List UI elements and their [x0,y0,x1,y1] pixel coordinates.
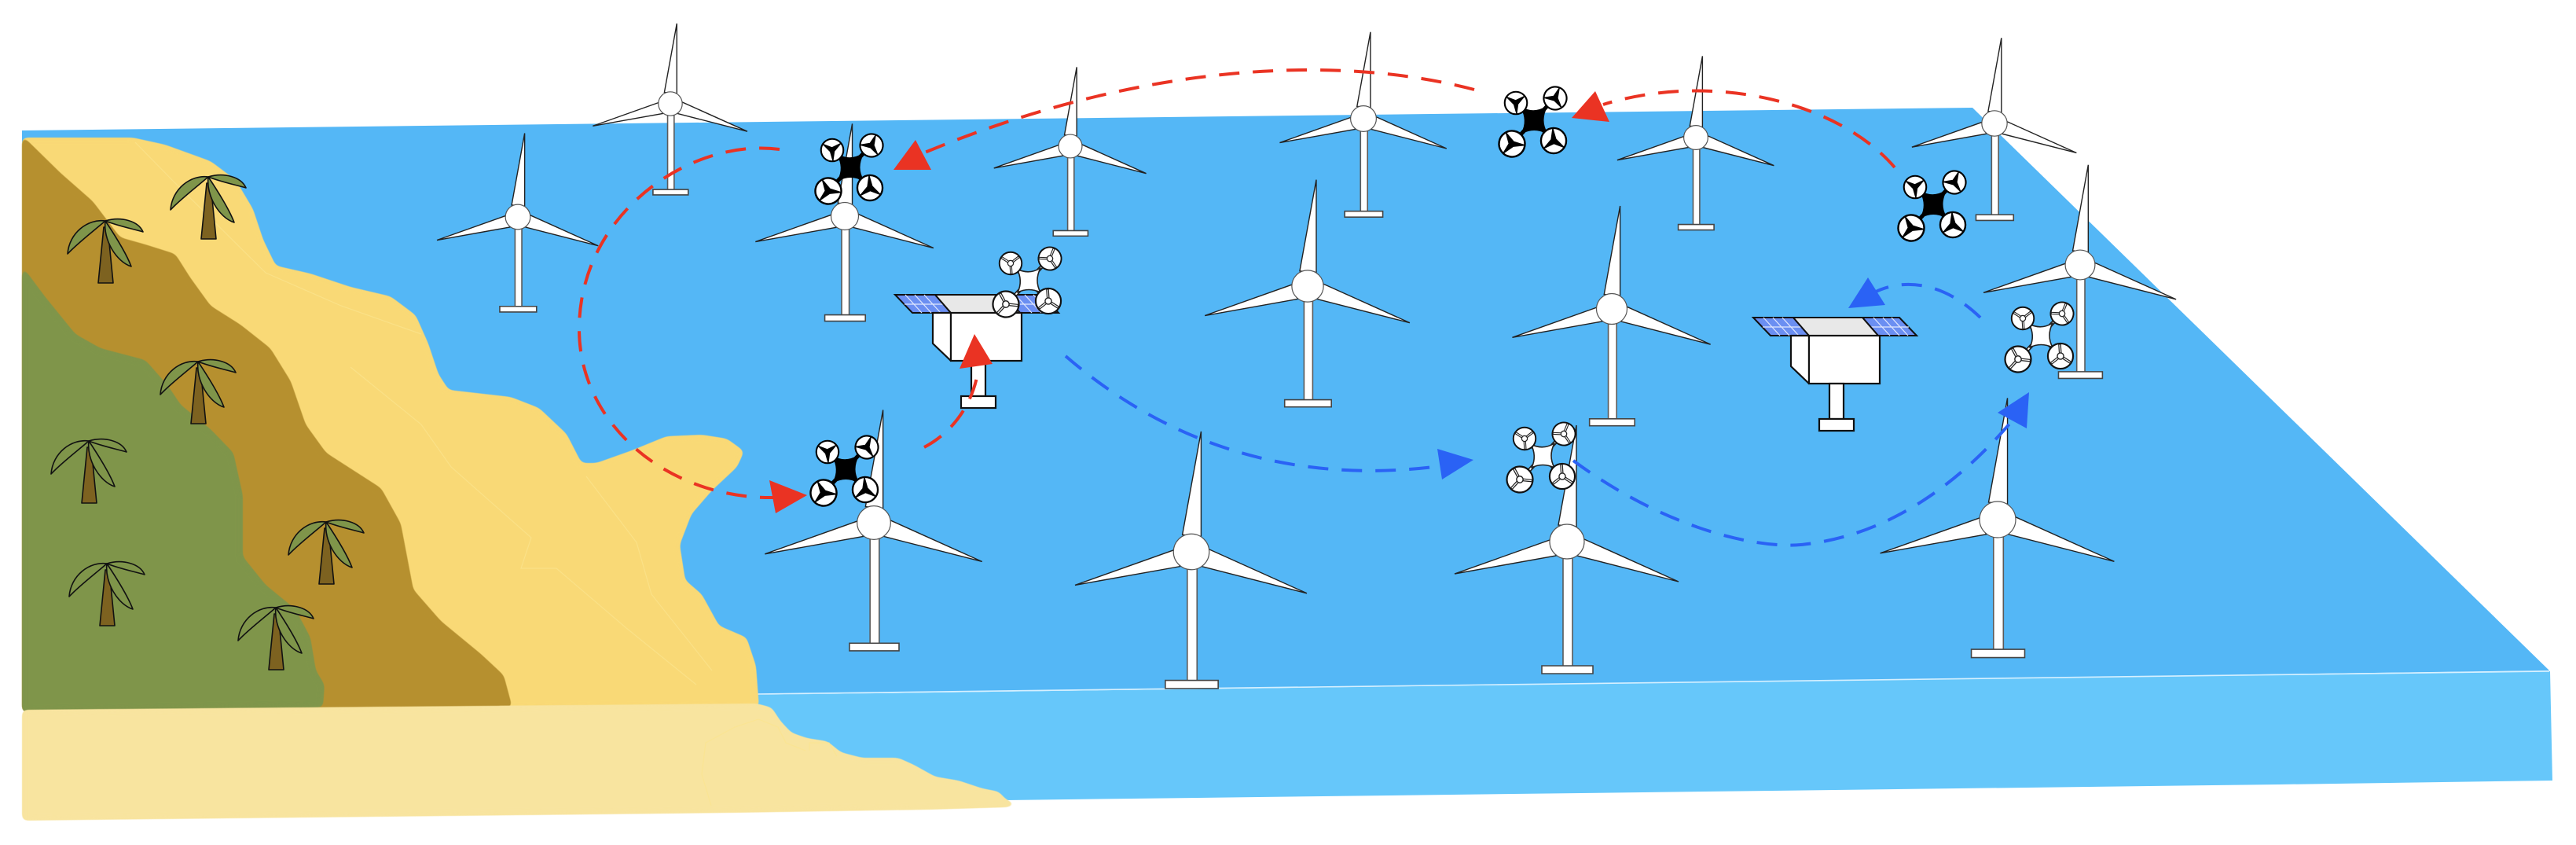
turbine [1617,56,1774,230]
white drone [1505,418,1580,494]
palm trees [51,175,364,670]
turbine [1881,398,2114,658]
turbine [1075,432,1307,689]
turbine [1455,425,1679,674]
red flight path: top right arc [1572,91,1895,167]
blue flight path: from platform to drone [1066,356,1473,479]
white drone [991,243,1066,319]
turbine [765,410,982,651]
land: front face contour lines [702,719,837,806]
drones [809,83,2078,508]
land: sand contour lines [135,142,712,685]
blue flight path: to right platform [1848,277,1980,318]
land: sand plateau [22,138,759,712]
platform with solar panels, left [895,295,1059,408]
turbine [593,24,747,195]
turbine [1205,180,1410,407]
turbine [994,67,1147,236]
turbine [755,123,934,321]
turbine [1912,38,2076,220]
palm 4 [51,439,127,503]
palm 5 [288,520,364,584]
land: green vegetation [22,266,325,712]
palm 7 [238,606,314,670]
turbine [1983,165,2176,378]
black drone [1896,167,1970,243]
black drone [809,432,883,508]
palm 2 [68,219,143,283]
white drone [2003,298,2078,374]
red flight path: long arc over farm [894,70,1474,170]
turbine [1512,206,1711,426]
land: sand front face [22,704,1017,821]
black drone [1497,83,1571,159]
red flight path: to platform [924,334,993,447]
ocean front face [754,671,2552,810]
platform with solar panels, right [1753,318,1917,431]
red flight path: left loop [579,148,807,513]
ocean edge highlight [756,671,2549,694]
land: brown soil band [22,135,512,712]
ocean surface [22,108,2549,707]
palm 6 [69,562,145,626]
turbine [1279,32,1447,217]
palm 3 [160,360,236,424]
wind turbines [437,24,2176,689]
blue flight path: lower right arc [1573,392,2029,546]
palm 1 [171,175,246,239]
turbine [437,133,598,312]
black drone [813,130,887,206]
